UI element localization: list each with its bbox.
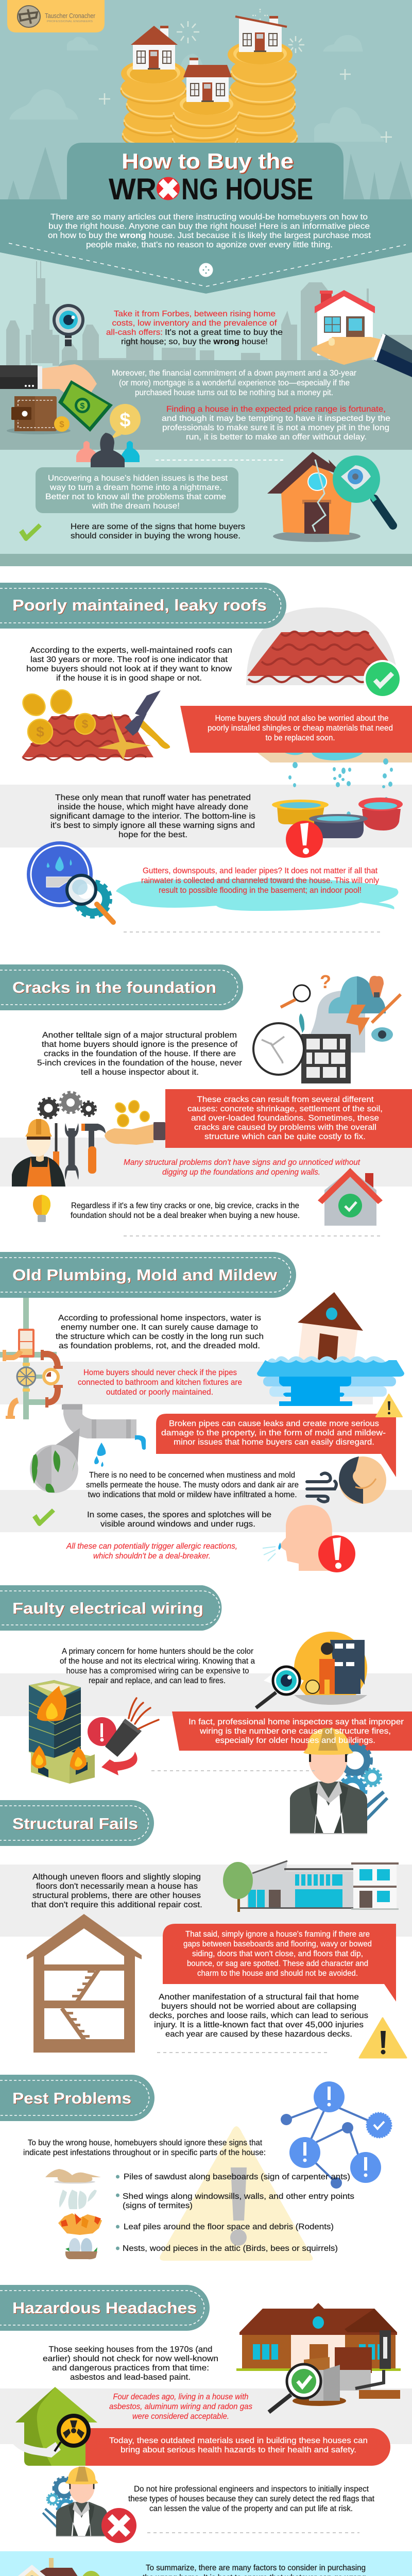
section header: faulty electrical wiring — [0, 1585, 221, 1631]
inspector illustration — [290, 1728, 387, 1834]
title plate — [67, 143, 344, 202]
section header: poorly maintained, leaky roofs: Poorly maintained, leaky roofs — [12, 596, 267, 614]
intro teal chevron band — [0, 199, 412, 294]
lightning — [346, 1005, 370, 1036]
illustration: pipes and valves — [0, 1298, 63, 1419]
forbes text block: Take it from Forbes, between rising home — [114, 310, 276, 318]
italic callout text — [124, 1158, 360, 1177]
structural text — [31, 1873, 202, 1909]
decks text — [149, 1993, 368, 2039]
water — [257, 1356, 404, 1406]
illustration: roof, coins and hammer — [19, 688, 170, 760]
tree — [80, 2571, 102, 2576]
intro paragraph: There are so many articles out there instructing would-be homebuyers on how to — [50, 213, 368, 222]
intro paragraph: people make, that's no reason to agonize over every little thing. — [86, 241, 333, 249]
house: middle — [183, 58, 232, 102]
pipes warning text: Home buyers should never check if the pipes — [83, 1368, 237, 1377]
water drops — [288, 758, 393, 818]
bullet list — [116, 2173, 354, 2253]
regardless text: Regardless if it's a few tiny cracks or one, big crevice, cracks in the — [71, 1201, 299, 1210]
callout pill: outdated materials: Today, these outdated materials used in building these houses can — [109, 2436, 368, 2445]
illustration: water inspection badge — [27, 841, 113, 922]
summary text — [142, 2564, 369, 2576]
band below intro — [0, 554, 412, 566]
forbes text block: costs, low inventory and the prevalence of — [112, 319, 277, 328]
illustration: roof, coins and hammer: $ — [82, 718, 88, 731]
forbes text block: right house; so, buy the wrong house! — [121, 337, 268, 346]
callout: framing: siding, doors that won't close, and floors that dip, — [192, 1950, 363, 1958]
decks text: each year are caused by these hazardous decks. — [165, 2030, 352, 2039]
sparkles and plus signs — [99, 9, 392, 143]
hazard text: earlier) should not check for now well-known — [43, 2354, 218, 2363]
brick house — [236, 2303, 401, 2371]
illustration: inspector with red X — [43, 2467, 136, 2543]
leak text: inside the house, which might have already done — [58, 803, 248, 811]
allergic reactions text: which shouldn't be a deal-breaker. — [93, 1552, 211, 1561]
dashed divider — [156, 460, 283, 461]
white block — [351, 1862, 399, 1910]
icon: warning triangle — [359, 2018, 406, 2058]
illustration: worker with tools and gears — [12, 1092, 165, 1187]
callout pill: outdated materials — [85, 2428, 390, 2466]
dashed divider — [147, 2532, 359, 2533]
icon: nest with eggs — [65, 2238, 97, 2259]
illustration: head with ideas and cracked wall — [253, 971, 401, 1083]
structural text: Although uneven floors and slightly sloping — [32, 1873, 201, 1882]
italic callout text: digging up the foundations and opening walls. — [162, 1168, 320, 1177]
pipes warning text — [78, 1368, 242, 1397]
icon: shed wings — [59, 2190, 97, 2209]
wiring text — [60, 1647, 255, 1685]
callout: causes of cracks: and over-loaded foundations. Sometimes, these — [191, 1114, 379, 1123]
house: right — [235, 16, 287, 52]
cracks text: Another telltale sign of a major structural problem — [42, 1031, 237, 1040]
gray-teal moreover panel — [0, 360, 412, 450]
house: left — [131, 26, 178, 70]
pest intro text: indicate pest infestations throughout or in specific parts of the house: — [23, 2148, 266, 2157]
callout: causes of cracks: causes: concrete shrinkage, settlement of the soil, — [187, 1105, 383, 1113]
callout: framing: That said, simply ignore a house's framing if there are — [185, 1930, 370, 1939]
roofs text: home buyers should not look at if they want to know — [26, 665, 232, 673]
hand and sleeve — [312, 334, 412, 377]
hazard text: asbestos and lead-based paint. — [70, 2373, 191, 2382]
icon: green check — [32, 1509, 55, 1526]
callout: shingles: poorly installed shingles or cheap materials that need — [208, 724, 393, 733]
section header: old plumbing, mold and mildew — [0, 1252, 296, 1298]
bullet: shed wings: Shed wings along windowsills, walls, and other entry points — [123, 2192, 354, 2201]
grey band — [0, 2388, 412, 2444]
grey band — [0, 1362, 373, 1404]
spores text: In some cases, the spores and splotches will be — [87, 1511, 271, 1519]
title: How to Buy the: How to Buy the — [122, 149, 294, 173]
pencil — [372, 994, 401, 1023]
moreover text: (or more) mortgage is a wonderful experience too—especially if the — [119, 379, 350, 387]
bullet: nests: Nests, wood pieces in the attic (Birds, bees or squirrels) — [123, 2244, 338, 2253]
worker head — [27, 1136, 50, 1157]
bullet: shed wings: (signs of termites) — [123, 2201, 193, 2210]
hero sky background — [0, 0, 412, 202]
illustration: house frame with stairs — [27, 1914, 142, 2053]
middle coin stack — [171, 91, 239, 154]
illustration: sneezing head — [263, 1505, 355, 1572]
icon: magnifier with eye — [53, 304, 84, 346]
icon: autumn leaves — [58, 2213, 102, 2235]
callout: improper wiring — [172, 1711, 412, 1751]
bullet: shed wings — [116, 2192, 354, 2210]
callout: shingles: to be replaced soon. — [266, 734, 335, 742]
magnifier — [294, 985, 310, 1002]
italic hazard text: asbestos, aluminum wiring and radon gas — [109, 2402, 252, 2411]
gutters text: Gutters, downspouts, and leader pipes? It does not matter if all that — [143, 867, 378, 875]
cracks text: cracks in the foundation of the house. If there are — [44, 1049, 236, 1058]
illustration: modern building — [223, 1861, 399, 1912]
crack lens — [253, 1023, 304, 1075]
roofs text: last 30 years or more. The roof is one indicator that — [30, 655, 228, 664]
callout: causes of cracks — [165, 1089, 412, 1148]
callout: framing: bounce, or sag are spotted. These add character and — [187, 1959, 368, 1968]
plumbing text: as foundation problems, rot, and the dreaded mold. — [59, 1342, 260, 1350]
hand with cuff — [105, 1124, 153, 1145]
improper wiring text: In fact, professional home inspectors say that improper — [188, 1718, 404, 1726]
finding a house text: Finding a house in the expected price range is fortunate, — [166, 405, 386, 414]
illustration: electrician in circle with magnifier — [256, 1632, 367, 1708]
illustration: cracked house under magnifier — [267, 452, 393, 542]
wiring text: repair and replace, and can lead to fires. — [89, 1676, 226, 1685]
red bucket — [358, 798, 403, 831]
magnifier lens — [256, 1667, 304, 1708]
signs text: should consider in buying the wrong house. — [71, 532, 241, 540]
dark bucket — [309, 814, 368, 838]
intro paragraph — [48, 213, 371, 249]
gutters text — [141, 867, 379, 895]
hazard text: Those seeking houses from the 1970s (and — [48, 2345, 212, 2354]
moreover text: purchased house turns out to be nothing but a money pit. — [135, 388, 333, 397]
regardless text: foundation should not be a deal breaker when buying a new house. — [71, 1211, 300, 1220]
roofs text — [26, 646, 232, 683]
screwdriver — [55, 1123, 58, 1151]
signs text — [71, 522, 245, 540]
section header: hazardous headaches — [0, 2285, 210, 2331]
cracks text: tell a house inspector about it. — [81, 1068, 199, 1077]
house — [298, 1292, 363, 1370]
grey band — [0, 1673, 412, 1716]
section header: poorly maintained, leaky roofs — [0, 583, 286, 629]
coins — [113, 1099, 149, 1127]
section header: old plumbing, mold and mildew: Old Plumbing, Mold and Mildew — [12, 1266, 278, 1284]
money: $ — [80, 402, 85, 411]
leak text: These only mean that runoff water has penetrated — [55, 793, 251, 802]
speech coin: $ — [119, 410, 131, 431]
illustration: roof, coins and hammer: $ — [36, 724, 44, 740]
coil — [306, 1680, 319, 1693]
leak text — [50, 793, 255, 839]
badge: red X — [101, 2508, 136, 2543]
flames — [31, 1686, 87, 1770]
decks text: injury. It is a little-known fact that over 45,000 injuries — [154, 2021, 364, 2029]
illustration: house with asbestos under magnifier — [236, 2303, 401, 2412]
wallet: $ — [59, 419, 64, 429]
plumbing text: enemy number one. It can surely cause damage to — [61, 1323, 258, 1332]
cracks text: 5-inch crevices in the foundation of the house, never — [37, 1059, 243, 1067]
right coin stack — [228, 40, 297, 151]
cracks text: that home buyers should ignore is the presence of — [42, 1040, 238, 1049]
pale warning triangle backdrop — [160, 2126, 313, 2261]
icon: green check — [19, 523, 42, 541]
title: WRONG HOUSE — [109, 173, 313, 206]
cracks text — [37, 1031, 243, 1077]
section header: hazardous headaches: Hazardous Headaches — [12, 2299, 197, 2317]
illustration: suburban house with tree and bench — [5, 2558, 102, 2576]
pipe column — [304, 2330, 391, 2373]
illustration: blue network of alerts — [281, 2081, 391, 2189]
grey band — [0, 1138, 412, 1187]
structural text: structural problems, there are other houses — [32, 1891, 201, 1900]
dashed divider — [124, 931, 380, 933]
callout: framing: charm to the house and should not be avoided. — [197, 1969, 358, 1978]
plumbing text: According to professional home inspectors, water is — [58, 1314, 261, 1323]
logo tab: Tauscher Cronacher: Tauscher Cronacher — [45, 12, 96, 20]
moreover text: Moreover, the financial commitment of a down payment and a 30-year — [112, 369, 357, 378]
dashed divider — [151, 1770, 315, 1771]
people busts — [76, 433, 140, 470]
leak text: it's best to simply ignore all these warning signs and — [50, 821, 255, 830]
light background for intro section — [0, 252, 412, 554]
wrench — [68, 1128, 75, 1170]
asbestos rock — [293, 2365, 400, 2406]
head — [309, 991, 365, 1053]
callout: uncovering hidden issues: Better not to know all the problems that come — [45, 493, 226, 501]
title: WRONG HOUSE: WR — [109, 173, 157, 206]
finding a house text — [162, 405, 390, 442]
gutters text: rainwater is collected and channeled toward the house. This will only — [141, 876, 379, 885]
inspectors text: Do not hire professional engineers and inspectors to initially inspect — [134, 2485, 369, 2494]
logo tab: Tauscher Cronacher: PROFESSIONAL ENGINEERS — [47, 20, 93, 23]
decks text: buyers should not be worried about are collapsing — [161, 2002, 356, 2011]
wiring text: house has a compromised wiring can be expensive to — [66, 1667, 249, 1675]
icon: warning triangle — [376, 1394, 402, 1417]
regardless text — [71, 1201, 300, 1220]
mold circle — [30, 1445, 78, 1493]
plumbing text: the structure which can be costly in the long run such — [56, 1332, 264, 1341]
callout: broken pipes — [156, 1414, 396, 1477]
skyline silhouette — [6, 261, 412, 366]
structural text: that don't require this additional repair cost. — [31, 1901, 202, 1909]
section header: faulty electrical wiring: Faulty electrical wiring — [12, 1599, 203, 1617]
magnifier with check — [269, 2364, 321, 2412]
sleeve and hand — [0, 364, 97, 417]
button with dots — [199, 263, 213, 277]
background pine trees — [8, 147, 412, 199]
italic callout text: Many structural problems don't have signs and go unnoticed without — [124, 1158, 360, 1167]
background clouds — [9, 35, 385, 142]
illustration: house held in hand — [312, 290, 412, 377]
illustration: flooded house — [257, 1292, 404, 1406]
dashed divider — [157, 2052, 328, 2053]
grey band — [0, 1865, 412, 1937]
roofs text: if the house it is in good shape or not. — [56, 674, 202, 683]
plumbing text — [56, 1314, 264, 1350]
callout: shingles — [180, 706, 412, 753]
wallet — [7, 396, 71, 434]
finding a house text: run, it is better to make an offer without delay. — [186, 433, 367, 442]
alert badge — [286, 821, 323, 858]
icon: nose in circle with wind — [307, 1456, 386, 1504]
bullet: sawdust: Piles of sawdust along baseboards (sign of carpenter ants) — [124, 2173, 350, 2181]
mustiness text — [86, 1471, 299, 1499]
callout: causes of cracks: These cracks can result from several different — [197, 1095, 374, 1104]
structural text: floors don't necessarily mean a house has — [36, 1882, 198, 1891]
leak text: hope for the best. — [118, 831, 187, 839]
eye badge — [371, 1027, 393, 1042]
pipes warning text: outdated or poorly maintained. — [106, 1388, 213, 1397]
worker body — [12, 1157, 65, 1187]
section header: pest problems — [0, 2075, 154, 2121]
improper wiring text — [188, 1718, 404, 1745]
illustration: red tiled roof with check — [246, 607, 402, 698]
section header: structural fails: Structural Fails — [12, 1815, 138, 1833]
wiring text: of the house and not its electrical wiring. Knowing that a — [60, 1657, 255, 1666]
inspectors text: can lessen the value of the property and can put life at risk. — [149, 2504, 353, 2513]
teal exclamation — [299, 1013, 304, 1033]
finding a house text: and though it may be tempting to have it inspected by the — [162, 414, 390, 423]
callout pill: outdated materials: bring about serious health hazards to their health and safety. — [121, 2446, 356, 2454]
finding a house text: professionals to make sure it is not a money pit in the long — [162, 423, 389, 432]
section header: structural fails — [0, 1800, 154, 1846]
inspectors text: these types of houses because they can surely detect the red flags that — [128, 2495, 375, 2503]
callout: uncovering hidden issues: with the dream house! — [92, 502, 180, 511]
illustration: leaking pipe with mold — [30, 1404, 146, 1493]
logo tab: Tauscher Cronacher — [7, 0, 105, 32]
pest intro text: To buy the wrong house, homebuyers should ignore these signs that — [28, 2139, 263, 2147]
grey band — [0, 1490, 412, 1532]
bullet: leaf piles: Leaf piles around the floor space and debris (Rodents) — [124, 2223, 334, 2231]
hazard text — [43, 2345, 218, 2382]
puddle — [116, 878, 398, 911]
illustration: hand paying into wallet — [0, 364, 141, 470]
illustration: burning building — [29, 1680, 95, 1784]
pest intro text — [23, 2139, 266, 2157]
summary panel background — [0, 2551, 412, 2576]
callout: shingles: Home buyers should not also be worried about the — [215, 714, 389, 723]
cloud — [329, 976, 386, 1013]
section header: cracks in the foundation: Cracks in the foundation — [12, 978, 216, 996]
moreover text — [112, 369, 357, 397]
dashed divider — [124, 1235, 380, 1236]
callout: uncovering hidden issues: Uncovering a house's hidden issues is the best — [48, 474, 228, 483]
forbes text block — [106, 310, 283, 346]
title: WRONG HOUSE: O — [157, 173, 180, 206]
section header: cracks in the foundation — [0, 964, 243, 1010]
illustration: green house with radiation magnifier — [6, 2387, 97, 2466]
bulb — [369, 976, 384, 997]
signs text: Here are some of the signs that home buyers — [71, 522, 245, 531]
forbes text block: all-cash offers: — [106, 328, 163, 337]
callout: broken pipes: minor issues that home buyers can easily disregard. — [174, 1438, 374, 1447]
callout: causes of cracks: cracks are caused by problems with the overall — [194, 1123, 376, 1132]
callout: broken pipes: damage to the property, in the form of mold and mildew- — [161, 1429, 386, 1437]
illustration: coin stacks with houses — [121, 16, 297, 154]
chevron dashed stitch — [9, 243, 406, 286]
hammer — [81, 1124, 106, 1133]
left coin stack — [121, 59, 192, 149]
mustiness text: two indications that mold or mildew have infiltrated a home. — [88, 1490, 297, 1499]
grey band — [0, 785, 412, 848]
decks text: decks, porches and loose rails, which can lead to serious — [149, 2011, 368, 2020]
italic hazard text — [109, 2393, 252, 2421]
roofs text: According to the experts, well-maintained roofs can — [30, 646, 232, 655]
spores text: visible around windows and under rugs. — [100, 1520, 255, 1529]
gears — [39, 1092, 96, 1118]
intro paragraph: buy the right house. Anyone can buy the right house! Here is an informative piece — [48, 222, 370, 231]
ceiling with leak — [258, 753, 412, 762]
question mark: ? — [320, 971, 331, 992]
leak text: significant damage to the interior. The bottom-line is — [50, 812, 255, 821]
allergic reactions text: All these can potentially trigger allergic reactions, — [66, 1542, 237, 1551]
wiring text: A primary concern for home hunters should be the color — [62, 1647, 254, 1656]
gutters text: result to possible flooding in the basement; an indoor pool! — [159, 886, 362, 895]
callout: uncovering hidden issues — [36, 467, 238, 513]
callout: framing — [163, 1924, 396, 2002]
callout: framing: gaps between baseboards and flooring, wavy or bowed — [183, 1940, 372, 1948]
illustration: frayed cable with alert and arrow — [88, 1698, 159, 1775]
spores text — [87, 1511, 271, 1529]
hazard text: and dangerous practices from that time: — [52, 2364, 209, 2372]
italic hazard text: Four decades ago, living in a house with — [113, 2393, 249, 2401]
section header: pest problems: Pest Problems — [12, 2089, 131, 2107]
callout: causes of cracks: structure which can be quite costly to fix. — [204, 1132, 366, 1141]
decks text: Another manifestation of a structural fail that home — [159, 1993, 359, 2002]
mustiness text: There is no need to be concerned when mustiness and mold — [89, 1471, 295, 1480]
money — [58, 380, 113, 432]
intro paragraph: on how to buy the wrong house. Just because it is likely the largest purchase most — [48, 231, 371, 240]
summary text: To summarize, there are many factors to consider in purchasing — [146, 2564, 366, 2572]
mustiness text: smells permeate the house. The musty odors and dank air are — [86, 1481, 299, 1489]
callout: uncovering hidden issues: way to turn a dream home into a nightmare. — [49, 483, 222, 492]
italic hazard text: were considered acceptable. — [132, 2412, 229, 2421]
allergic reactions text — [66, 1542, 237, 1561]
pipes warning text: connected to bathroom and kitchen fixtures are — [78, 1378, 242, 1387]
inspectors text — [128, 2485, 375, 2513]
icon: light bulb — [33, 1195, 50, 1222]
icon: house with check — [318, 1168, 383, 1226]
icon: sawdust pile — [45, 2169, 101, 2183]
forbes text block: It's not a great time to buy the — [165, 328, 283, 337]
improper wiring text: wiring is the number one cause of structure fires, — [199, 1727, 391, 1736]
illustration: buckets catching water — [272, 798, 403, 858]
yellow bucket — [272, 800, 329, 824]
speech coin — [110, 404, 141, 439]
improper wiring text: especially for older houses and buildings. — [215, 1736, 375, 1745]
title: WRONG HOUSE: NG HOUSE — [181, 173, 313, 206]
brick wall — [301, 1034, 351, 1083]
callout: broken pipes: Broken pipes can cause leaks and create more serious — [169, 1419, 379, 1428]
tree — [223, 1862, 253, 1912]
